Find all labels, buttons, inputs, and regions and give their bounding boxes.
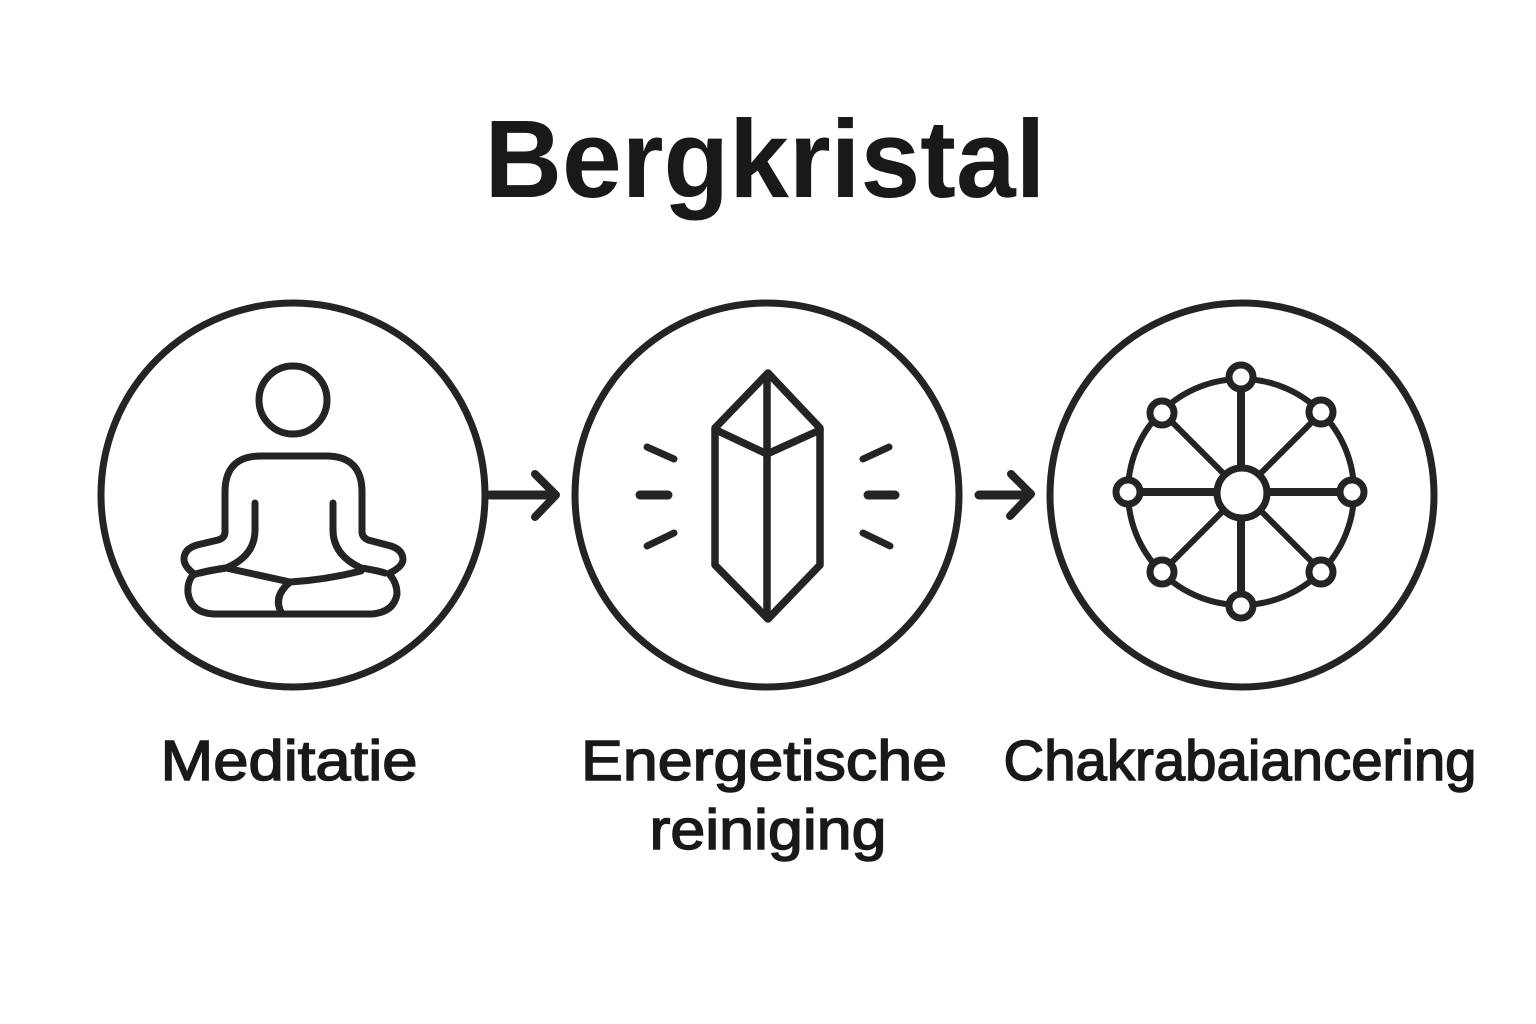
label: energetische reiniging: reiniging [650,798,886,862]
panel: energetische reiniging circle [575,303,959,687]
title: Bergkristal [484,98,1046,221]
label: energetische reiniging [581,729,947,862]
icon: crystal [715,373,820,619]
arrow: reiniging to chakrabalancering [979,474,1031,516]
label: chakrabalancering: Chakrabaiancering [1004,729,1476,793]
arrow: meditatie to reiniging [490,474,556,517]
label: meditatie: Meditatie [160,729,418,793]
icon: meditating person [184,366,403,614]
panel: chakrabalancering circle [1050,303,1434,687]
icon: chakra wheel [1116,365,1364,618]
panel: meditatie circle [101,303,485,687]
label: energetische reiniging: Energetische [581,729,947,793]
icon: radiating lines [640,447,895,546]
